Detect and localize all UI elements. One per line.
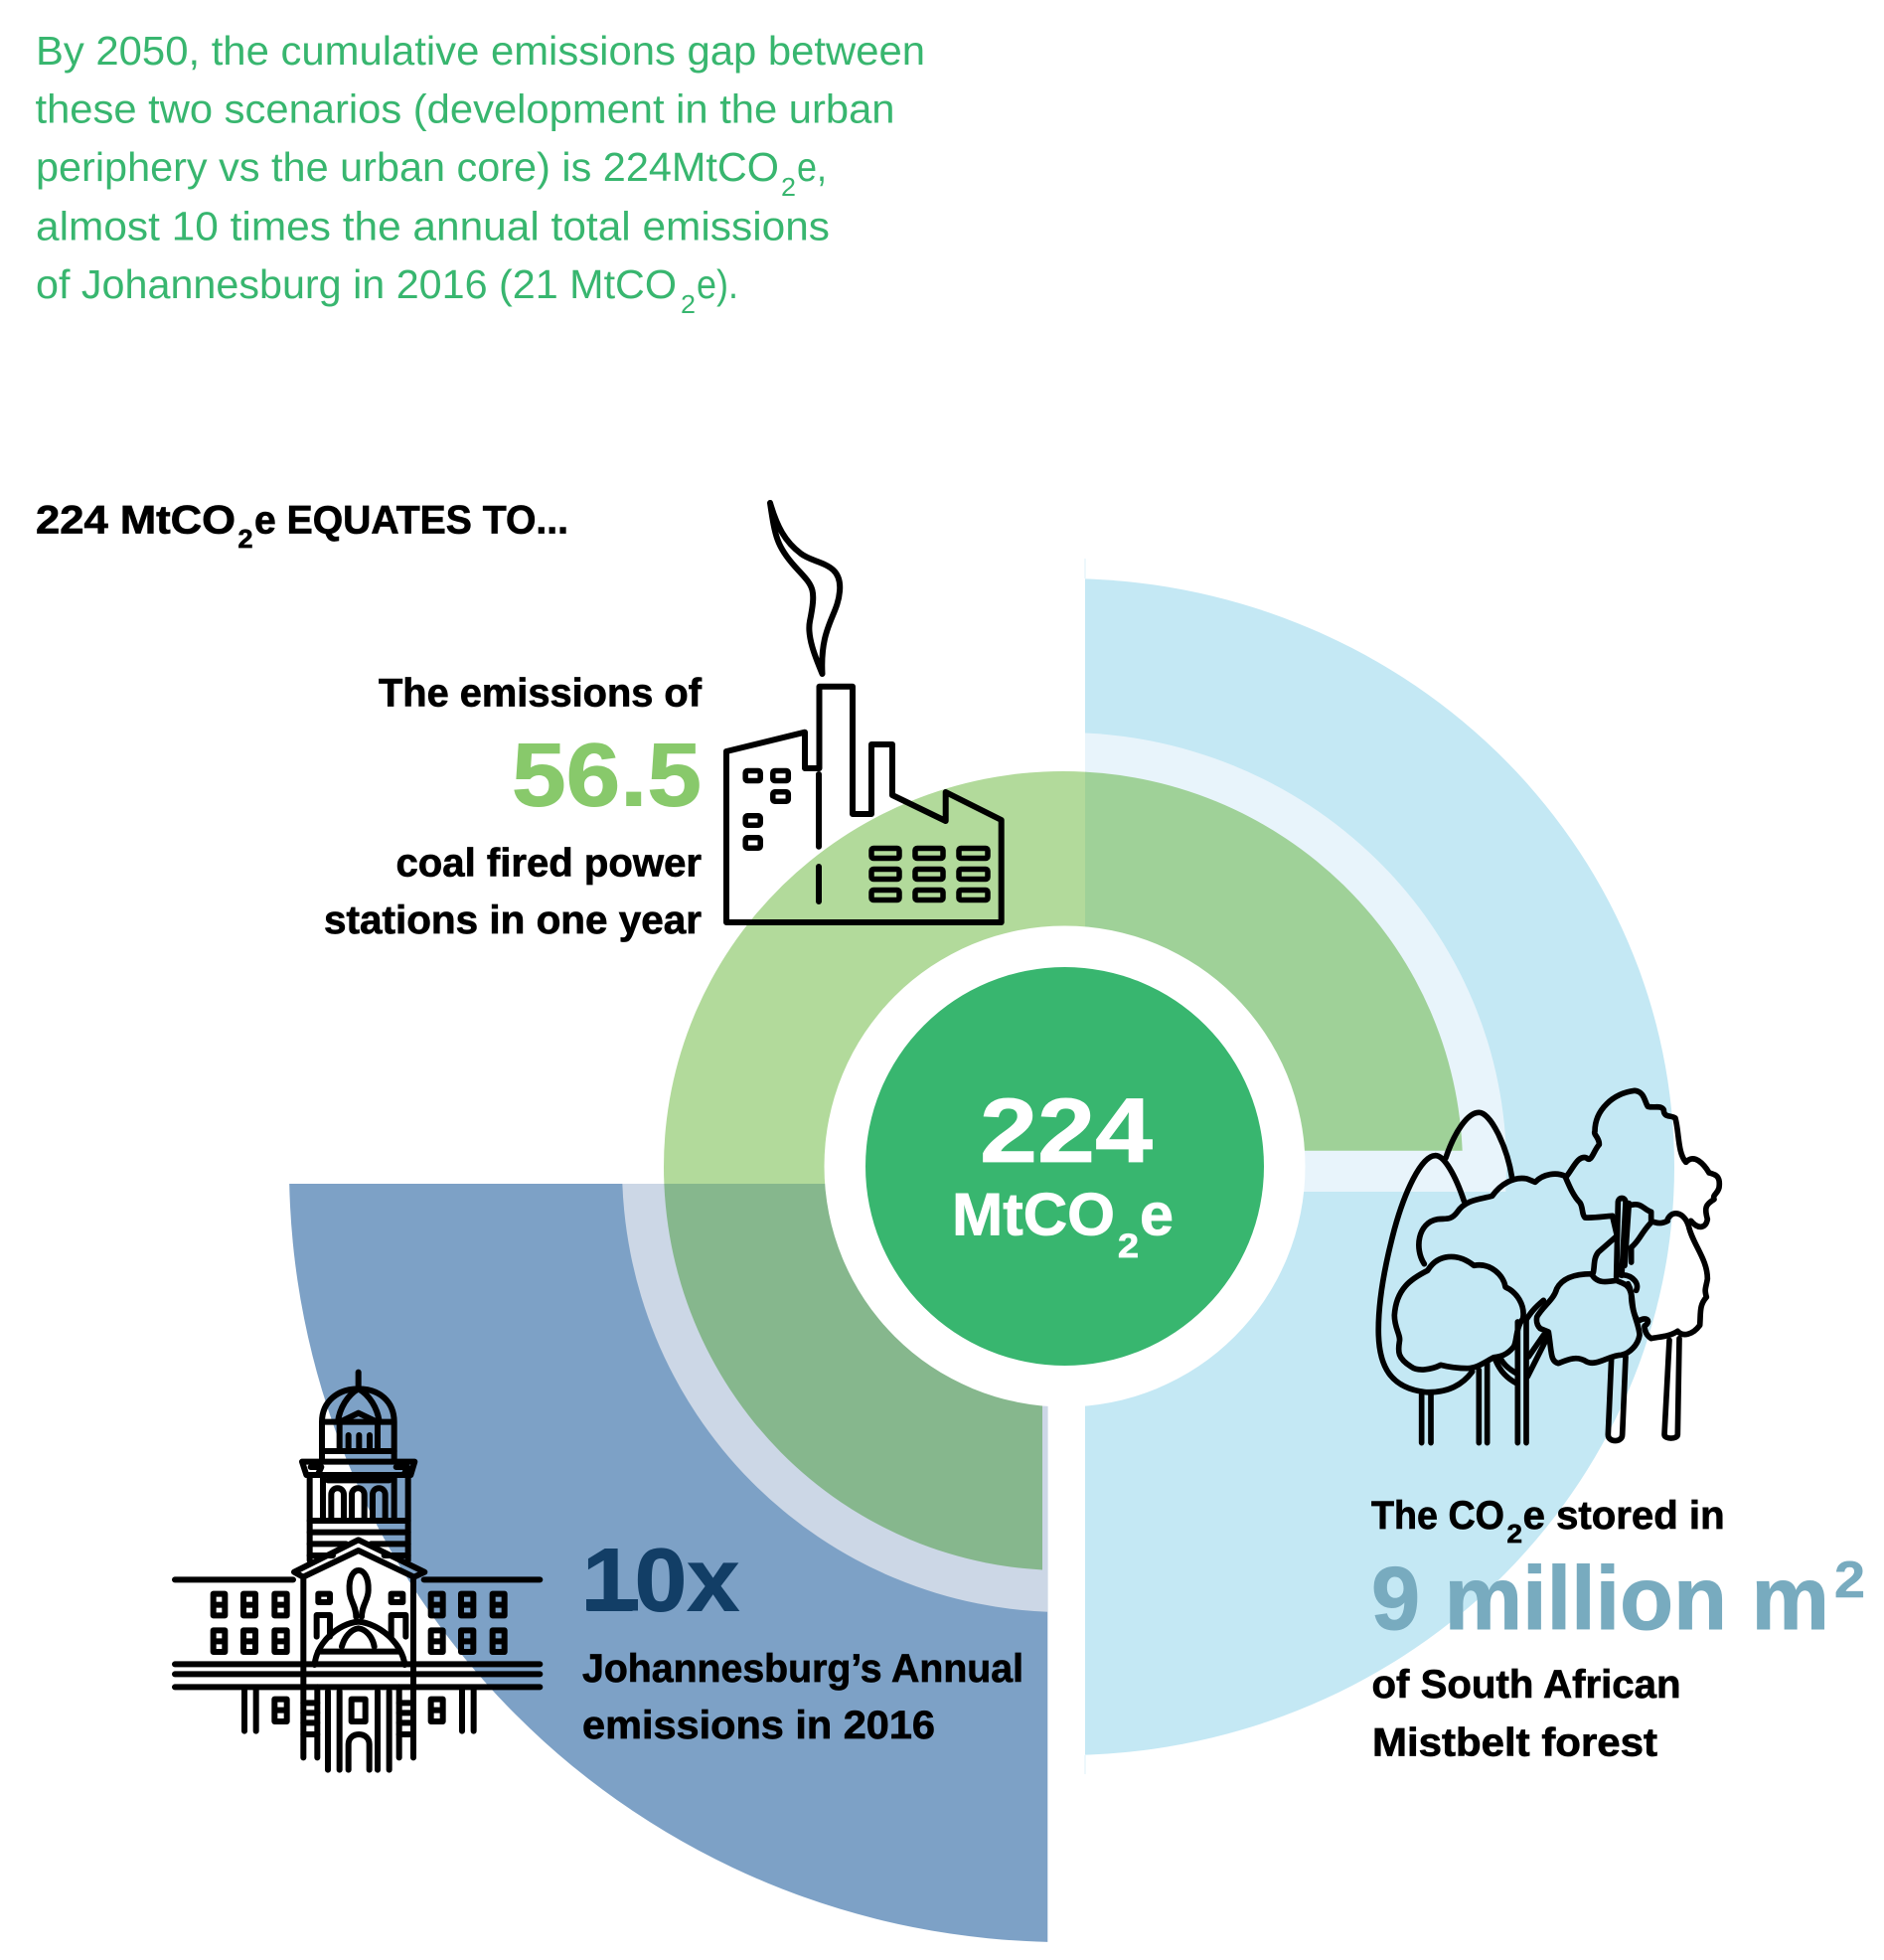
intro paragraph: 2 [781, 172, 796, 202]
callout: power stations: The emissions of [379, 672, 703, 716]
quadrant: power stations green [664, 771, 1085, 1184]
section heading: 224 MtCO [36, 499, 236, 543]
callout: Johannesburg emissions: Johannesburg’s Annual [582, 1647, 1023, 1691]
faint quadrant edge, top [1084, 559, 1086, 578]
centre label [952, 1080, 1174, 1265]
intro paragraph: these two scenarios (development in the urban [36, 85, 894, 131]
callout: forest carbon [1371, 1494, 1865, 1765]
callout: power stations: 56.5 [512, 727, 702, 826]
callout: power stations [324, 672, 703, 942]
section heading: 2 [238, 524, 252, 554]
intro paragraph: periphery vs the urban core) is 224MtCO [36, 144, 779, 190]
intro paragraph: of Johannesburg in 2016 (21 MtCO [36, 261, 677, 307]
centre label: MtCO [952, 1182, 1115, 1248]
intro paragraph: 2 [681, 289, 696, 319]
intro paragraph: almost 10 times the annual total emissions [36, 203, 830, 248]
callout: power stations: coal fired power [395, 842, 702, 886]
callout: Johannesburg emissions: 10x [582, 1531, 739, 1630]
callout: forest carbon: Mistbelt forest [1372, 1721, 1657, 1765]
callout: Johannesburg emissions [582, 1531, 1023, 1747]
white ring [825, 926, 1306, 1407]
section heading [36, 499, 568, 554]
icon: city hall building [175, 1373, 540, 1770]
faint quadrant edge, bottom [1084, 1755, 1086, 1774]
intro paragraph: e, [797, 144, 827, 190]
quadrant: forest pale inner band [1085, 734, 1506, 1192]
quadrant: Johannesburg emissions outer [289, 1184, 1047, 1942]
quadrant: forest outer ring [1085, 578, 1674, 1755]
callout: forest carbon: of South African [1371, 1663, 1681, 1707]
quadrant: Johannesburg emissions inner band [622, 1184, 1047, 1612]
intro paragraph: e). [697, 261, 738, 307]
centre circle [865, 967, 1264, 1366]
icon: factory with smoke [726, 503, 1002, 922]
centre label: 2 [1118, 1227, 1139, 1265]
callout: forest carbon: e stored in [1523, 1494, 1725, 1538]
chart: concentric quadrants [289, 392, 1839, 1942]
callout: forest carbon: The CO [1371, 1494, 1504, 1538]
intro paragraph: By 2050, the cumulative emissions gap between [36, 28, 925, 74]
callout: forest carbon: 9 million m [1371, 1550, 1829, 1649]
overlap: green over pale blue [1085, 771, 1463, 1151]
centre label: e [1140, 1182, 1174, 1248]
callout: forest carbon: 2 [1506, 1519, 1522, 1549]
overlap: green over steel blue [664, 1184, 1042, 1570]
centre label: 224 [980, 1080, 1153, 1182]
callout: power stations: stations in one year [324, 898, 702, 942]
callout: forest carbon: 2 [1834, 1552, 1865, 1609]
icon: forest trees [1378, 1090, 1719, 1443]
callout: Johannesburg emissions: emissions in 2016 [582, 1704, 935, 1747]
section heading: e EQUATES TO... [254, 499, 568, 543]
intro paragraph [36, 28, 925, 319]
